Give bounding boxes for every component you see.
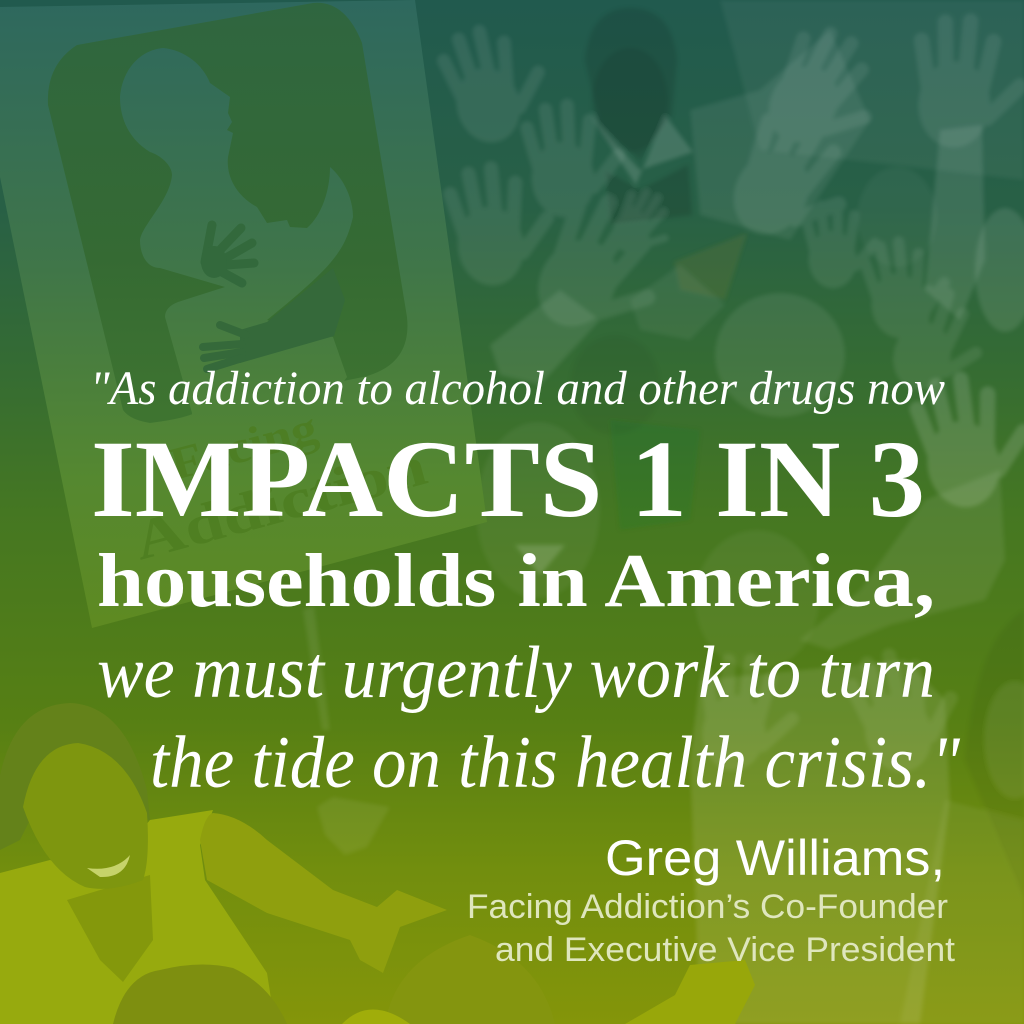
logo adult hand and arm xyxy=(203,268,345,369)
logo light silhouette: adult hugging child xyxy=(120,48,353,440)
quote line 3: households in America, xyxy=(97,539,935,623)
forearm below centre hand xyxy=(490,290,600,385)
woman centre right xyxy=(695,530,819,670)
shirt xyxy=(0,810,275,1024)
attribution title line 2: and Executive Vice President xyxy=(495,931,956,969)
neck and chest xyxy=(67,875,153,982)
child head bottom xyxy=(113,964,287,1024)
sign board xyxy=(0,0,487,628)
sign pole xyxy=(303,606,330,730)
quote line 1: "As addiction to alcohol and other drugs now xyxy=(90,362,945,415)
attribution xyxy=(467,830,956,969)
sign faded lettering: Facing xyxy=(164,402,322,490)
quote line 5: the tide on this health crisis." xyxy=(150,722,961,804)
smiling man centre xyxy=(476,422,600,598)
quote line 2: IMPACTS 1 IN 3 xyxy=(91,418,925,540)
attribution title line 1: Facing Addiction’s Co-Founder xyxy=(467,888,948,926)
logo dark rounded block xyxy=(48,3,407,423)
logo child hand xyxy=(201,225,254,283)
sign with logo xyxy=(0,0,487,628)
smile xyxy=(87,855,130,877)
man top centre xyxy=(585,8,693,225)
hair xyxy=(0,703,150,850)
dark green centre gap xyxy=(610,420,700,530)
cardigan and arms upper right xyxy=(690,30,870,240)
quote xyxy=(90,362,961,804)
right raised arm and shoulder xyxy=(800,470,1005,650)
crowd: tonal shapes behind the quote xyxy=(303,0,1024,1024)
sign faded lettering: Addiction xyxy=(127,435,433,573)
face xyxy=(23,743,148,889)
hand bottom centre xyxy=(342,1010,410,1024)
pointing hand and sleeve xyxy=(317,797,390,855)
woman in foreground lower left xyxy=(0,703,755,1024)
far right woman xyxy=(965,610,1024,900)
blonde woman centre right xyxy=(715,293,845,417)
face bottom centre xyxy=(385,935,555,1024)
faces right xyxy=(857,167,937,267)
hand bottom right xyxy=(625,960,755,1024)
hands xyxy=(439,19,1023,780)
attribution name: Greg Williams, xyxy=(605,830,945,886)
sign faded lettering xyxy=(127,402,433,573)
raised forearm right xyxy=(925,125,985,320)
outstretched arm xyxy=(200,813,447,973)
teal wash upper right xyxy=(720,0,1024,180)
quote line 4: we must urgently work to turn xyxy=(97,632,935,714)
